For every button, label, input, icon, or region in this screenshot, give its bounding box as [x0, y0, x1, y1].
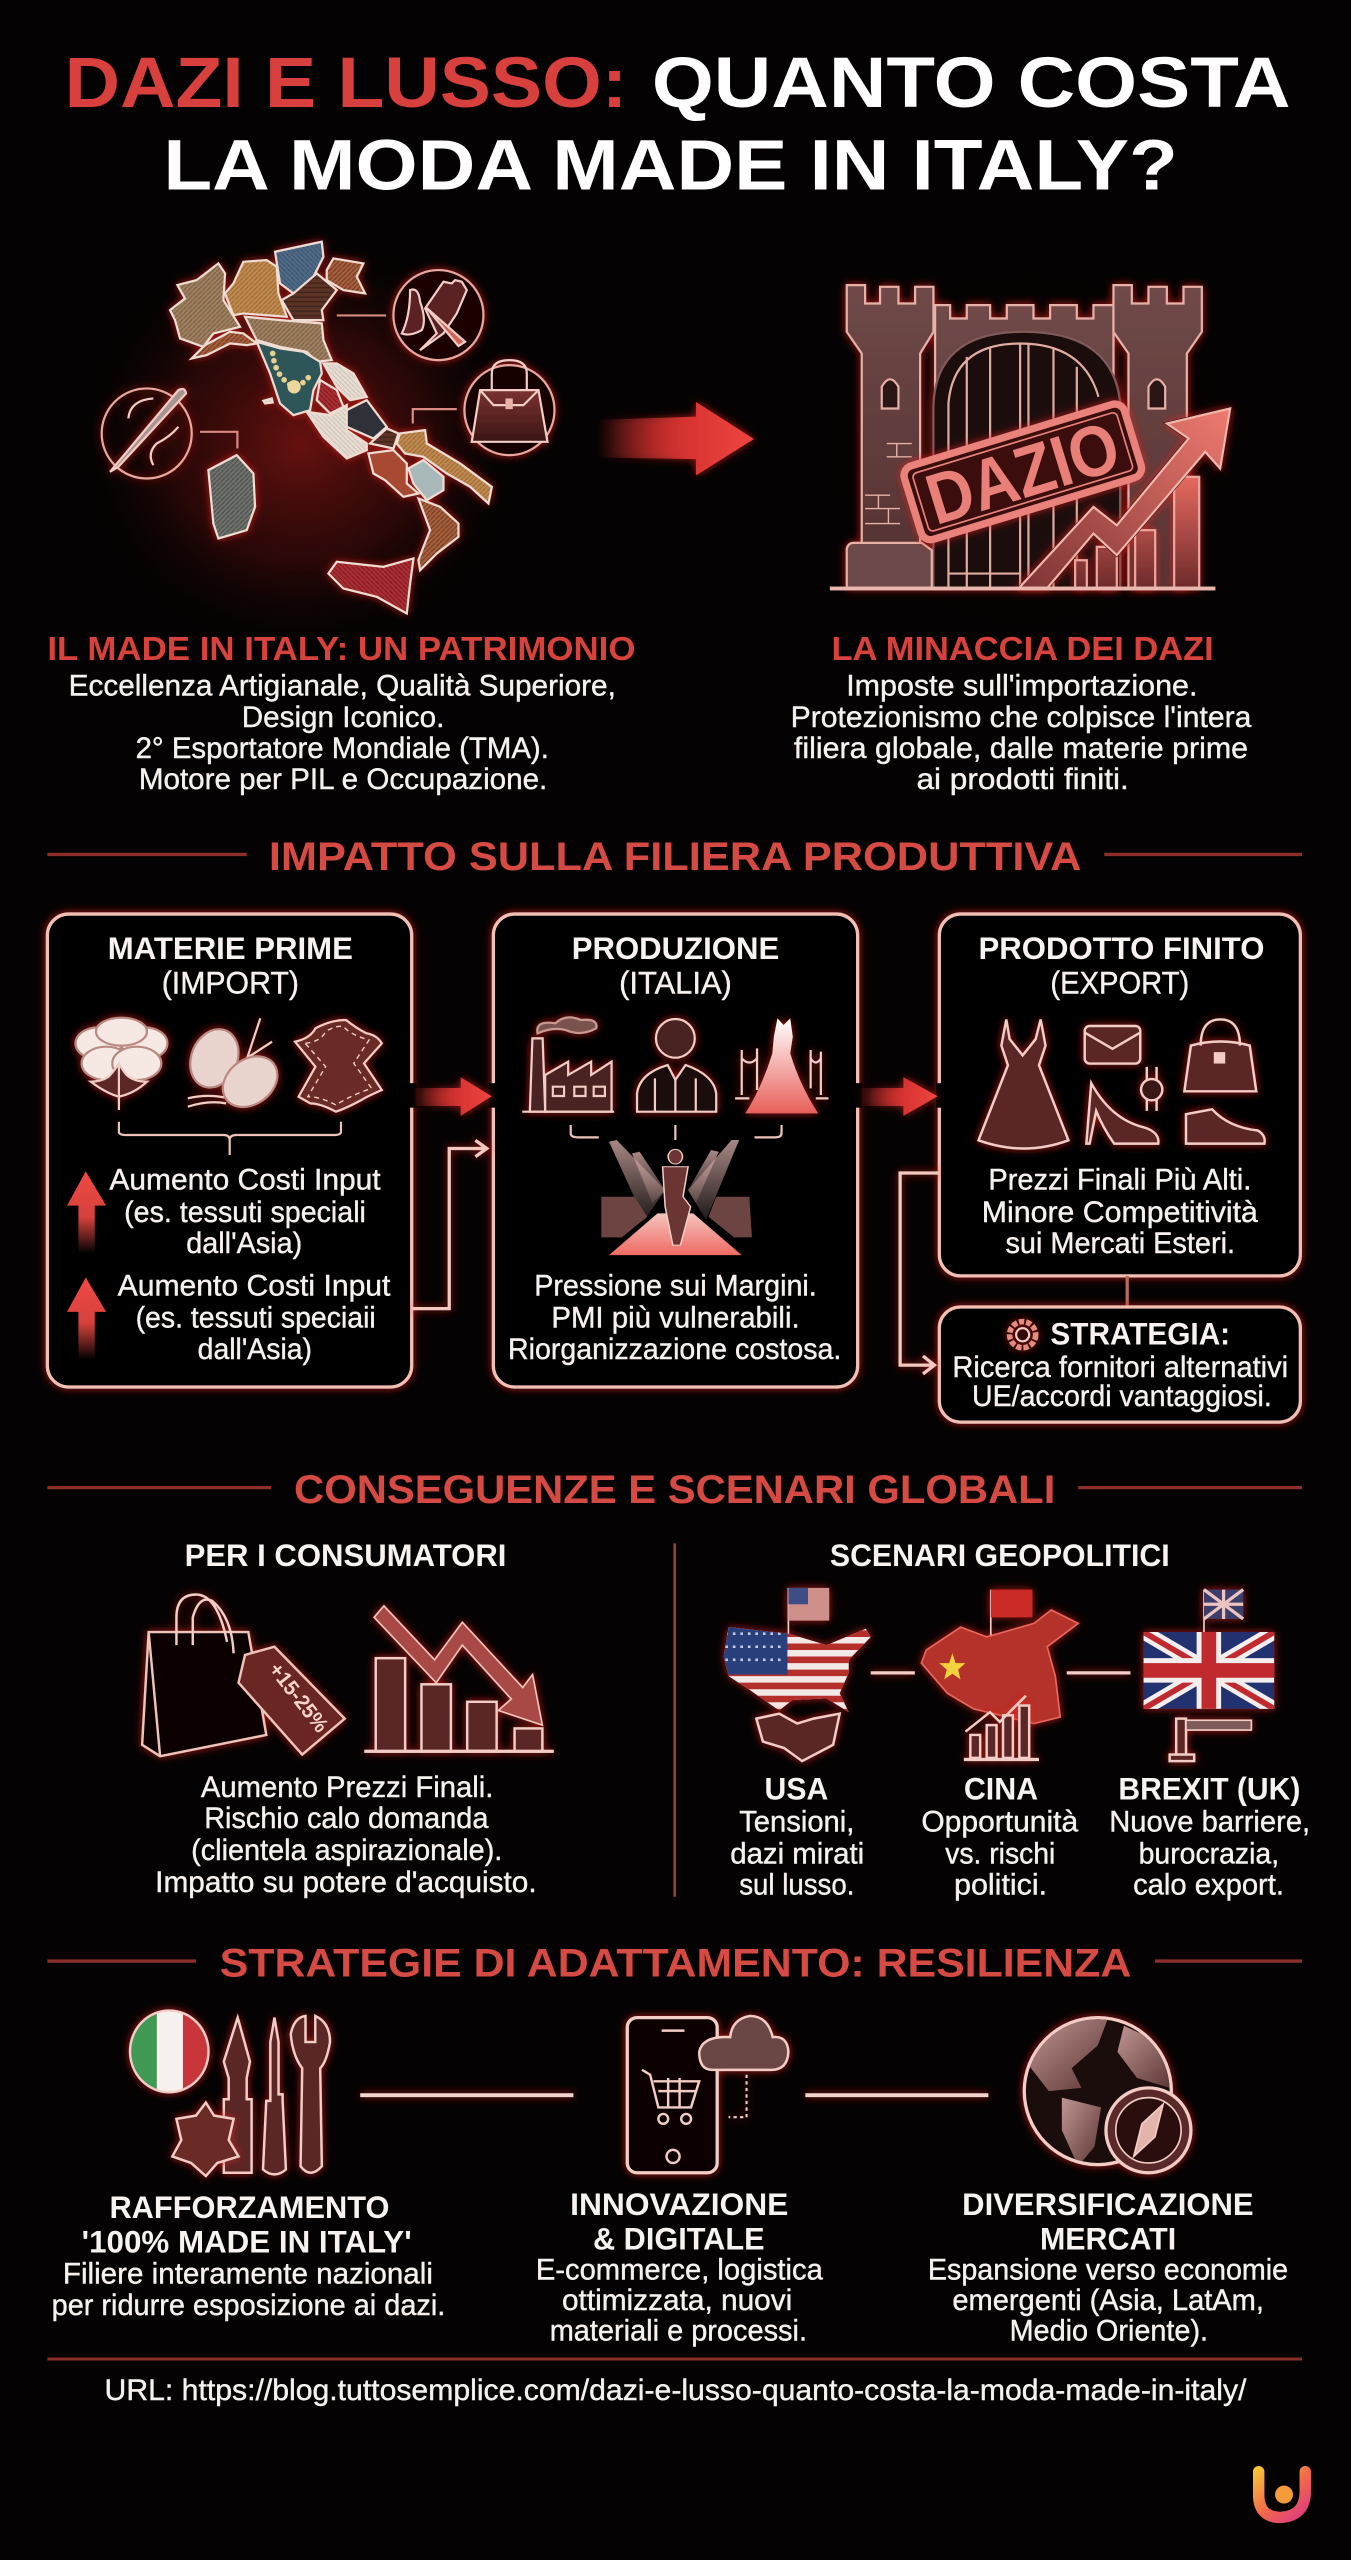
divider — [674, 1543, 676, 1897]
text: INNOVAZIONE — [570, 2187, 788, 2222]
heading: raw materials: MATERIE PRIME — [108, 931, 353, 966]
strategy text — [952, 1317, 1288, 1413]
strategy text: Ricerca fornitori alternativi — [952, 1351, 1288, 1384]
arrow: cost up 1 — [67, 1171, 106, 1253]
text: '100% MADE IN ITALY' — [82, 2224, 412, 2259]
text: consumers — [155, 1771, 537, 1899]
panel: production — [493, 914, 858, 1387]
icon: China map flag — [921, 1590, 1078, 1724]
text: final prices: Prezzi Finali Più Alti. — [988, 1163, 1251, 1196]
heading: production: PRODUZIONE — [572, 931, 779, 966]
title: DAZI E LUSSO: — [65, 43, 627, 123]
text: final prices — [982, 1163, 1259, 1260]
panel: geopolitical scenarios — [719, 1538, 1310, 1901]
panel: made in italy illustration — [72, 229, 554, 660]
icon: USA map flag — [719, 1588, 882, 1719]
icon: catwalk show — [601, 1140, 752, 1255]
text: emergenti (Asia, LatAm, — [952, 2284, 1264, 2317]
heading: geopolitics: SCENARI GEOPOLITICI — [830, 1538, 1170, 1573]
text: per ridurre esposizione ai dazi. — [52, 2289, 445, 2322]
text: Medio Oriente). — [1010, 2314, 1208, 2347]
text block: tariff threat: Protezionismo che colpisce l'intera — [791, 701, 1252, 734]
arrow: raw materials to production — [408, 1077, 497, 1116]
text block: made in italy: Eccellenza Artigianale, Qualità Superiore, — [69, 669, 616, 702]
icon: base line — [830, 587, 1215, 590]
text: input cost 2: Aumento Costi Input — [118, 1270, 390, 1303]
arrow: cost up 2 — [67, 1278, 106, 1359]
icon: factory — [522, 1017, 614, 1112]
text: E-commerce, logistica — [536, 2253, 823, 2286]
icon: shopping bag with price tag: +15-25% — [264, 1659, 332, 1737]
text: ottimizzata, nuovi — [562, 2284, 792, 2317]
panel: innovation and digital — [536, 2016, 823, 2347]
column: Brexit: calo export. — [1133, 1868, 1284, 1901]
heading: finished product: PRODOTTO FINITO — [979, 931, 1264, 966]
text: production effects: PMI più vulnerabili. — [551, 1302, 800, 1335]
text block: made in italy: IL MADE IN ITALY: UN PATRIMONIO — [47, 631, 635, 668]
connector lines — [200, 315, 457, 448]
icon: handbag — [464, 360, 554, 455]
text: input cost 1: (es. tessuti speciali — [124, 1196, 366, 1229]
connector: product to strategy — [1126, 1276, 1128, 1307]
text: input cost 1: Aumento Costi Input — [109, 1163, 381, 1196]
icon: leather piece — [172, 2103, 239, 2176]
arrow: strategy connector — [900, 1173, 939, 1374]
icon: gear — [1010, 1322, 1036, 1348]
text: production effects — [508, 1270, 841, 1366]
text: Filiere interamente nazionali — [63, 2257, 433, 2290]
text — [52, 2190, 445, 2322]
panel: consumers — [142, 1538, 554, 1899]
icon: handshake — [756, 1714, 840, 1761]
text: consumers: Impatto su potere d'acquisto. — [155, 1866, 537, 1899]
text: input cost 2 — [118, 1270, 390, 1366]
arrow: made in italy to tariff threat — [598, 402, 754, 475]
connectors between countries — [871, 1672, 1130, 1674]
icon: leather hide — [295, 1020, 382, 1112]
icon: shopping bag with price tag — [142, 1594, 345, 1756]
heading: consumers: PER I CONSUMATORI — [185, 1538, 506, 1573]
column: USA: sul lusso. — [739, 1868, 854, 1901]
DAZIO stamp: DAZIO — [917, 407, 1129, 541]
text: input cost 1: dall'Asia) — [186, 1227, 302, 1260]
icon: logo — [1259, 2472, 1305, 2517]
text block: made in italy — [47, 631, 635, 796]
source URL: URL: https://blog.tuttosemplice.com/dazi-e-lusso-quanto-costa-la-moda-made-in-italy/ — [105, 2374, 1247, 2407]
text: final prices: sui Mercati Esteri. — [1005, 1227, 1235, 1260]
text — [536, 2187, 823, 2347]
text: input cost 2: (es. tessuti speciaii — [136, 1302, 376, 1335]
footer rule — [47, 2358, 1302, 2360]
icon: border barrier — [1170, 1719, 1251, 1761]
icon: rising chart arrow — [1018, 409, 1230, 589]
column: Brexit — [1109, 1771, 1310, 1901]
text: production effects: Riorganizzazione costosa. — [508, 1333, 841, 1366]
audience — [601, 1197, 752, 1237]
heading: finished product — [979, 931, 1264, 1000]
arrow: raw materials thin connector — [412, 1140, 487, 1309]
panel: strategy — [939, 1307, 1300, 1422]
title — [65, 43, 1291, 206]
column: USA: USA — [765, 1771, 828, 1806]
title: LA MODA MADE IN ITALY? — [163, 126, 1178, 206]
panel: finished product — [939, 914, 1300, 1276]
column: China: vs. rischi — [945, 1837, 1055, 1870]
text block: tariff threat: filiera globale, dalle materie prime — [794, 732, 1248, 765]
text block: made in italy: Motore per PIL e Occupazione. — [139, 763, 547, 796]
column: Brexit: burocrazia, — [1139, 1837, 1279, 1870]
icon: needle and thread — [102, 388, 192, 478]
heading: consequences: CONSEGUENZE E SCENARI GLOBALI — [294, 1468, 1055, 1512]
text: DIVERSIFICAZIONE — [962, 2187, 1254, 2222]
column: Brexit: BREXIT (UK) — [1118, 1771, 1300, 1806]
map of Italy in fabric patches — [170, 242, 492, 614]
connector lines between strategies — [360, 2094, 988, 2096]
arrow: production to finished product — [854, 1077, 944, 1116]
text: MERCATI — [1040, 2222, 1176, 2257]
column: USA: dazi mirati — [730, 1837, 864, 1870]
text: & DIGITALE — [593, 2222, 765, 2257]
text: consumers: Aumento Prezzi Finali. — [201, 1771, 493, 1804]
heading: production — [572, 931, 779, 1000]
icon: cotton — [76, 1018, 167, 1110]
icon: dress on display — [735, 1018, 829, 1113]
text: RAFFORZAMENTO — [109, 2190, 389, 2225]
icon: Italian flag badge — [129, 2009, 211, 2094]
text block: tariff threat — [791, 631, 1252, 796]
text: consumers: (clientela aspirazionale). — [191, 1834, 502, 1867]
heading: raw materials — [108, 931, 353, 1000]
text — [928, 2187, 1288, 2347]
text block: tariff threat: Imposte sull'importazione. — [846, 669, 1197, 702]
column: China: CINA — [964, 1771, 1038, 1806]
icon: castle — [847, 285, 1202, 589]
text: consumers: Rischio calo domanda — [204, 1802, 489, 1835]
panel: strengthening made in italy — [52, 2009, 445, 2322]
icon: small growth chart — [964, 1696, 1039, 1761]
strategy text: STRATEGIA: — [1050, 1317, 1230, 1352]
icon: falling sales chart — [364, 1606, 554, 1753]
heading: adaptation strategies: STRATEGIE DI ADATTAMENTO: RESILIENZA — [220, 1942, 1131, 1986]
bracket — [119, 1122, 341, 1155]
heading: supply chain impact: IMPATTO SULLA FILIERA PRODUTTIVA — [269, 835, 1081, 879]
column: China: Opportunità — [921, 1805, 1079, 1838]
heading: raw materials: (IMPORT) — [162, 965, 299, 1000]
gold necklace detail — [273, 353, 312, 393]
panel: raw materials — [47, 914, 412, 1387]
icon: smartphone with cart and cloud — [627, 2016, 788, 2173]
icon: globe and compass — [1024, 2018, 1191, 2173]
icon: craft tools — [224, 2016, 330, 2174]
text block: made in italy: Design Iconico. — [242, 701, 444, 734]
panel: market diversification — [928, 2018, 1288, 2347]
text: production effects: Pressione sui Margini. — [534, 1270, 817, 1303]
text: input cost 2: dall'Asia) — [198, 1333, 312, 1366]
text block: made in italy: 2° Esportatore Mondiale (TMA). — [136, 732, 549, 765]
column: USA — [730, 1771, 864, 1901]
column: China: politici. — [954, 1868, 1047, 1901]
column: USA: Tensioni, — [739, 1805, 854, 1838]
text: input cost 1 — [109, 1163, 381, 1260]
brackets — [571, 1125, 782, 1140]
heading: production: (ITALIA) — [619, 965, 732, 1000]
strategy text: UE/accordi vantaggiosi. — [972, 1380, 1272, 1413]
text: materiali e processi. — [550, 2314, 807, 2347]
text: final prices: Minore Competitività — [982, 1196, 1259, 1229]
column: Brexit: Nuove barriere, — [1109, 1805, 1310, 1838]
text: Espansione verso economie — [928, 2253, 1288, 2286]
icon: silk cocoons — [185, 1018, 287, 1112]
panel: castle with DAZIO stamp — [809, 257, 1250, 642]
text block: tariff threat: LA MINACCIA DEI DAZI — [832, 631, 1214, 668]
icon: hand and needle — [393, 270, 483, 360]
icon: UK flag — [1144, 1590, 1274, 1709]
icons: fashion products — [979, 1019, 1265, 1148]
icon: artisan person — [637, 1019, 716, 1112]
column: China — [921, 1771, 1079, 1901]
heading: finished product: (EXPORT) — [1050, 965, 1189, 1000]
text block: tariff threat: ai prodotti finiti. — [916, 763, 1129, 796]
title: QUANTO COSTA — [652, 43, 1291, 123]
